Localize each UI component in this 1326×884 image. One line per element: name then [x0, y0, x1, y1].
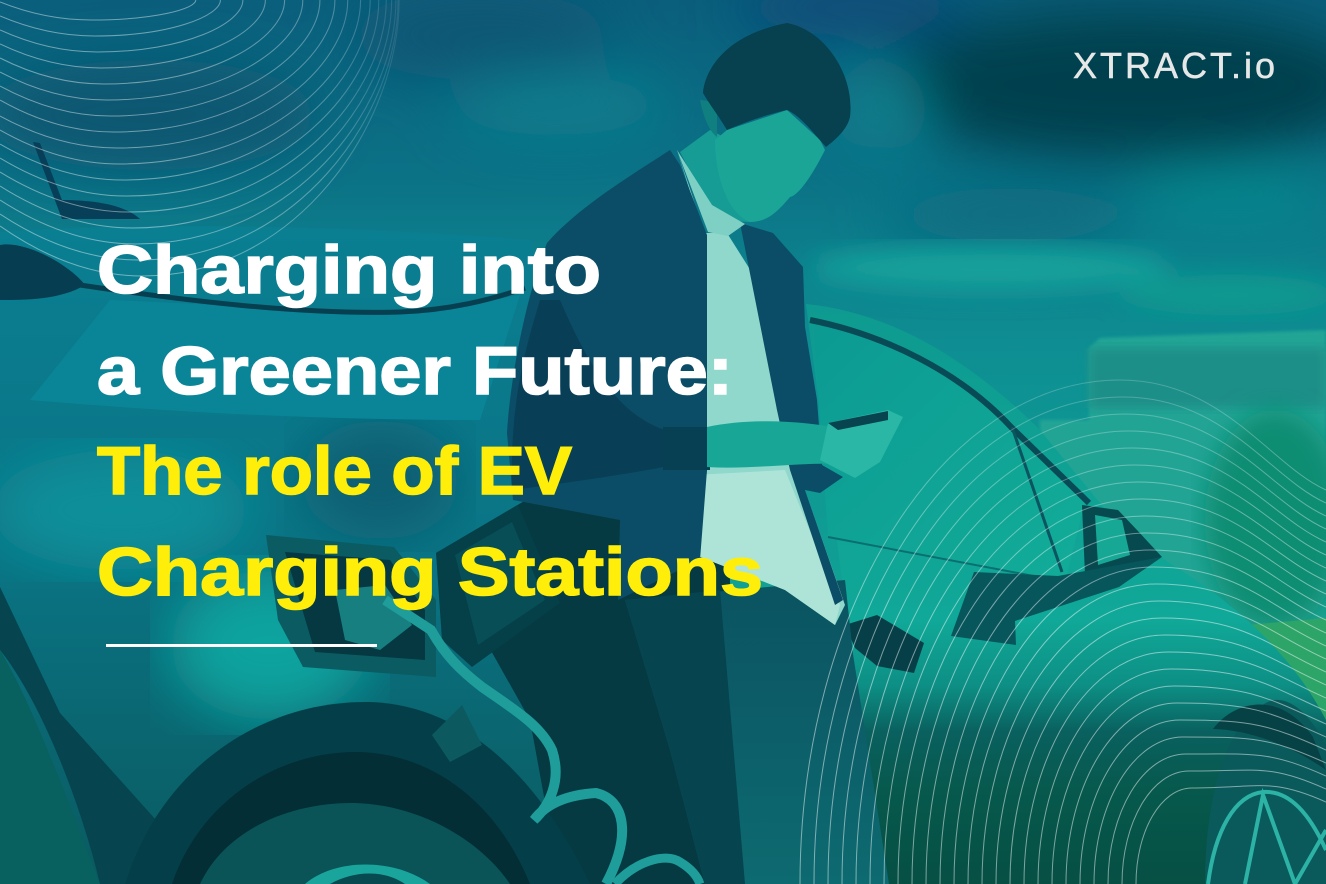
- building and foliage in the distance: [1040, 330, 1326, 720]
- dark diagonal reflection: [0, 587, 155, 884]
- door handle: [845, 615, 924, 673]
- concentric arcs bottom right: [800, 380, 1326, 884]
- hands and phone: [707, 421, 827, 468]
- hair: [703, 23, 851, 147]
- divider under title: [106, 644, 377, 647]
- jeans: [625, 580, 889, 884]
- shirt: [677, 150, 845, 625]
- shirt collar: [677, 150, 745, 236]
- charging port: [266, 535, 436, 677]
- car on the right: [806, 304, 1326, 884]
- body behind the man: [436, 480, 730, 884]
- door sheen: [170, 570, 370, 720]
- logo: XTRACT.io: [1073, 45, 1275, 86]
- man leaning on the car: [507, 23, 903, 884]
- subtitle line 2: Charging Stations: [97, 534, 763, 610]
- subtitle line 1: The role of EV: [97, 433, 572, 509]
- side window: [30, 295, 520, 420]
- title line 2: a Greener Future:: [97, 333, 733, 409]
- neck and face: [680, 130, 750, 222]
- charging cable: [385, 600, 622, 884]
- mirror reflection on door: [951, 557, 1162, 645]
- right wheel arch and wheel: [1205, 700, 1326, 884]
- charging flap: [436, 537, 492, 667]
- car on the left: [0, 142, 730, 884]
- mirror: [1082, 505, 1162, 575]
- door frame line: [810, 320, 1089, 503]
- concentric arcs top left: [0, 0, 399, 276]
- title: [97, 232, 763, 610]
- title line 1: Charging into: [97, 232, 601, 308]
- wheel arch and tyre: [155, 702, 560, 884]
- jacket: [507, 150, 707, 600]
